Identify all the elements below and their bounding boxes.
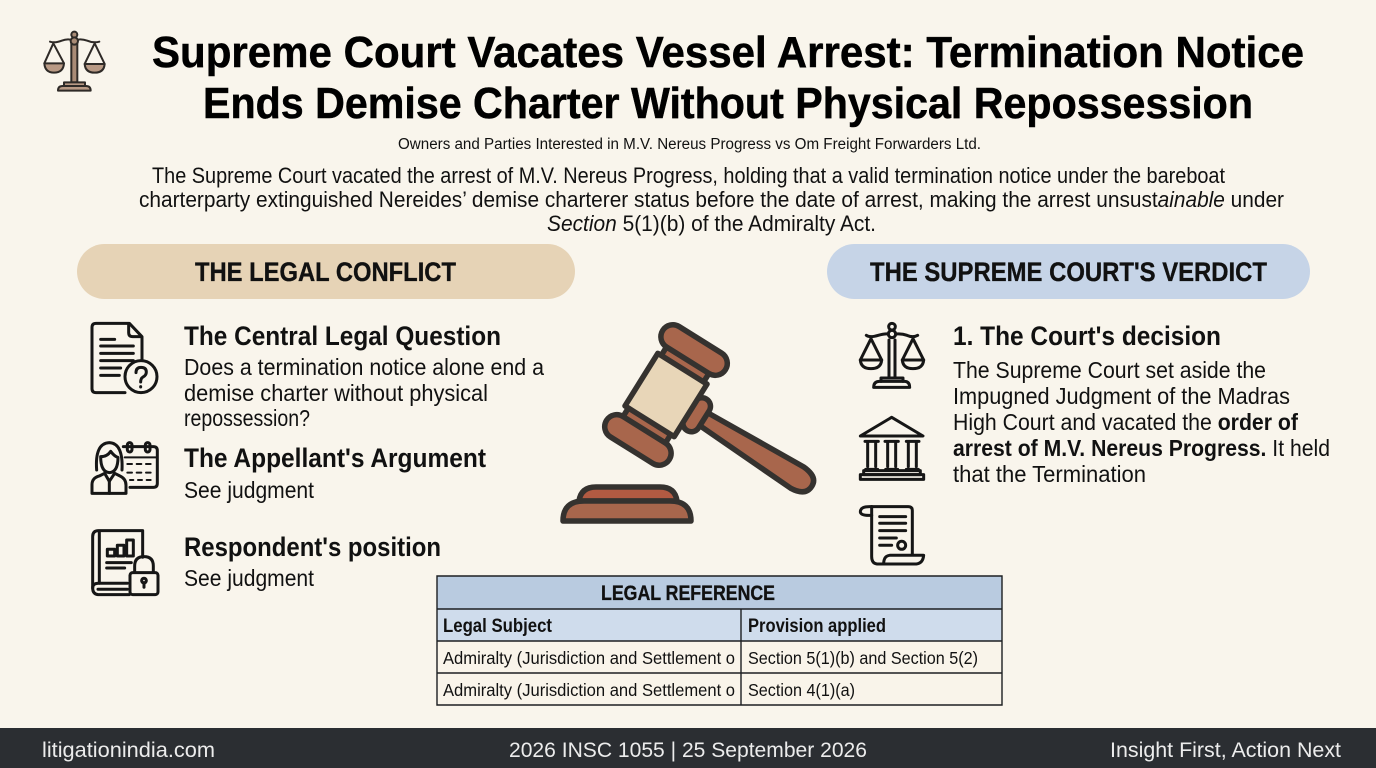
icon: scales outline: [860, 323, 924, 387]
footer bar: Insight First, Action Next: [1110, 738, 1341, 762]
panel: the supreme court's verdict heading: THE SUPREME COURT'S VERDICT: [870, 257, 1267, 287]
table: legal reference: Admiralty (Jurisdiction and Settlement o: [443, 648, 735, 668]
summary paragraph: The Supreme Court vacated the arrest of M.V. Nereus Progress, holding that a valid termination notice under the bareboat: [152, 163, 1225, 188]
text: the central legal question: repossession?: [184, 405, 310, 431]
summary paragraph: charterparty extinguished Nereides’ demise charterer status before the date of arrest, making the arrest unsustainable under: [139, 187, 1284, 212]
title: Ends Demise Charter Without Physical Repossession: [203, 79, 1253, 128]
icon: person with calendar: [92, 443, 157, 493]
text: the central legal question: The Central Legal Question: [184, 321, 501, 351]
summary paragraph: Section 5(1)(b) of the Admiralty Act.: [547, 211, 876, 236]
table: legal reference: Admiralty (Jurisdiction and Settlement o: [443, 680, 735, 700]
panel: the legal conflict heading: [77, 244, 575, 299]
panel: legal conflict items: [92, 321, 544, 595]
text: the court's decision: Impugned Judgment of the Madras: [953, 383, 1290, 409]
panel: the legal conflict heading: THE LEGAL CONFLICT: [195, 257, 456, 287]
panel: verdict item: [860, 321, 1330, 564]
text: the central legal question: Does a termination notice alone end a: [184, 354, 544, 380]
footer bar: [0, 728, 1376, 768]
text: respondent's position: [184, 532, 441, 591]
icon: courthouse: [860, 417, 924, 479]
text: the appellant's argument: [184, 443, 486, 503]
text: the court's decision: The Supreme Court set aside the: [953, 357, 1266, 383]
gavel head and handle: [600, 320, 846, 541]
icon: book with chart and padlock: [93, 531, 158, 595]
title: [152, 28, 1304, 128]
text: the central legal question: demise charter without physical: [184, 380, 488, 406]
text: the appellant's argument: The Appellant's Argument: [184, 443, 486, 473]
text: the court's decision: 1. The Court's decision: [953, 321, 1221, 351]
subtitle: case name: Owners and Parties Interested in M.V. Nereus Progress vs Om Freight Forwarders Ltd.: [398, 136, 981, 153]
footer bar: 2026 INSC 1055 | 25 September 2026: [509, 738, 867, 762]
table: legal reference: Legal Subject: [443, 616, 553, 637]
text: the court's decision: High Court and vacated the order of: [953, 409, 1298, 435]
table: legal reference: LEGAL REFERENCE: [601, 582, 775, 605]
panel: the supreme court's verdict heading: [827, 244, 1310, 299]
icon: scales of justice: [44, 32, 105, 91]
text: the court's decision: [953, 321, 1330, 487]
footer bar: litigationindia.com: [42, 738, 215, 762]
text: respondent's position: See judgment: [184, 565, 315, 591]
title: Supreme Court Vacates Vessel Arrest: Termination Notice: [152, 28, 1304, 77]
text: the court's decision: arrest of M.V. Nereus Progress. It held: [953, 435, 1330, 461]
summary paragraph: [139, 163, 1284, 236]
icon: gavel and sound block: [563, 320, 846, 541]
sound block: [579, 487, 677, 501]
text: the central legal question: [184, 321, 544, 431]
icon: document with question mark: [92, 323, 157, 393]
text: the court's decision: that the Termination: [953, 461, 1146, 487]
text: the appellant's argument: See judgment: [184, 477, 315, 503]
table: legal reference: Section 4(1)(a): [748, 680, 855, 700]
table: legal reference: [437, 576, 1002, 705]
icon: scroll document: [860, 507, 924, 564]
table: legal reference: Provision applied: [748, 616, 886, 637]
text: respondent's position: Respondent's position: [184, 532, 441, 562]
table: legal reference: Section 5(1)(b) and Section 5(2): [748, 648, 978, 668]
